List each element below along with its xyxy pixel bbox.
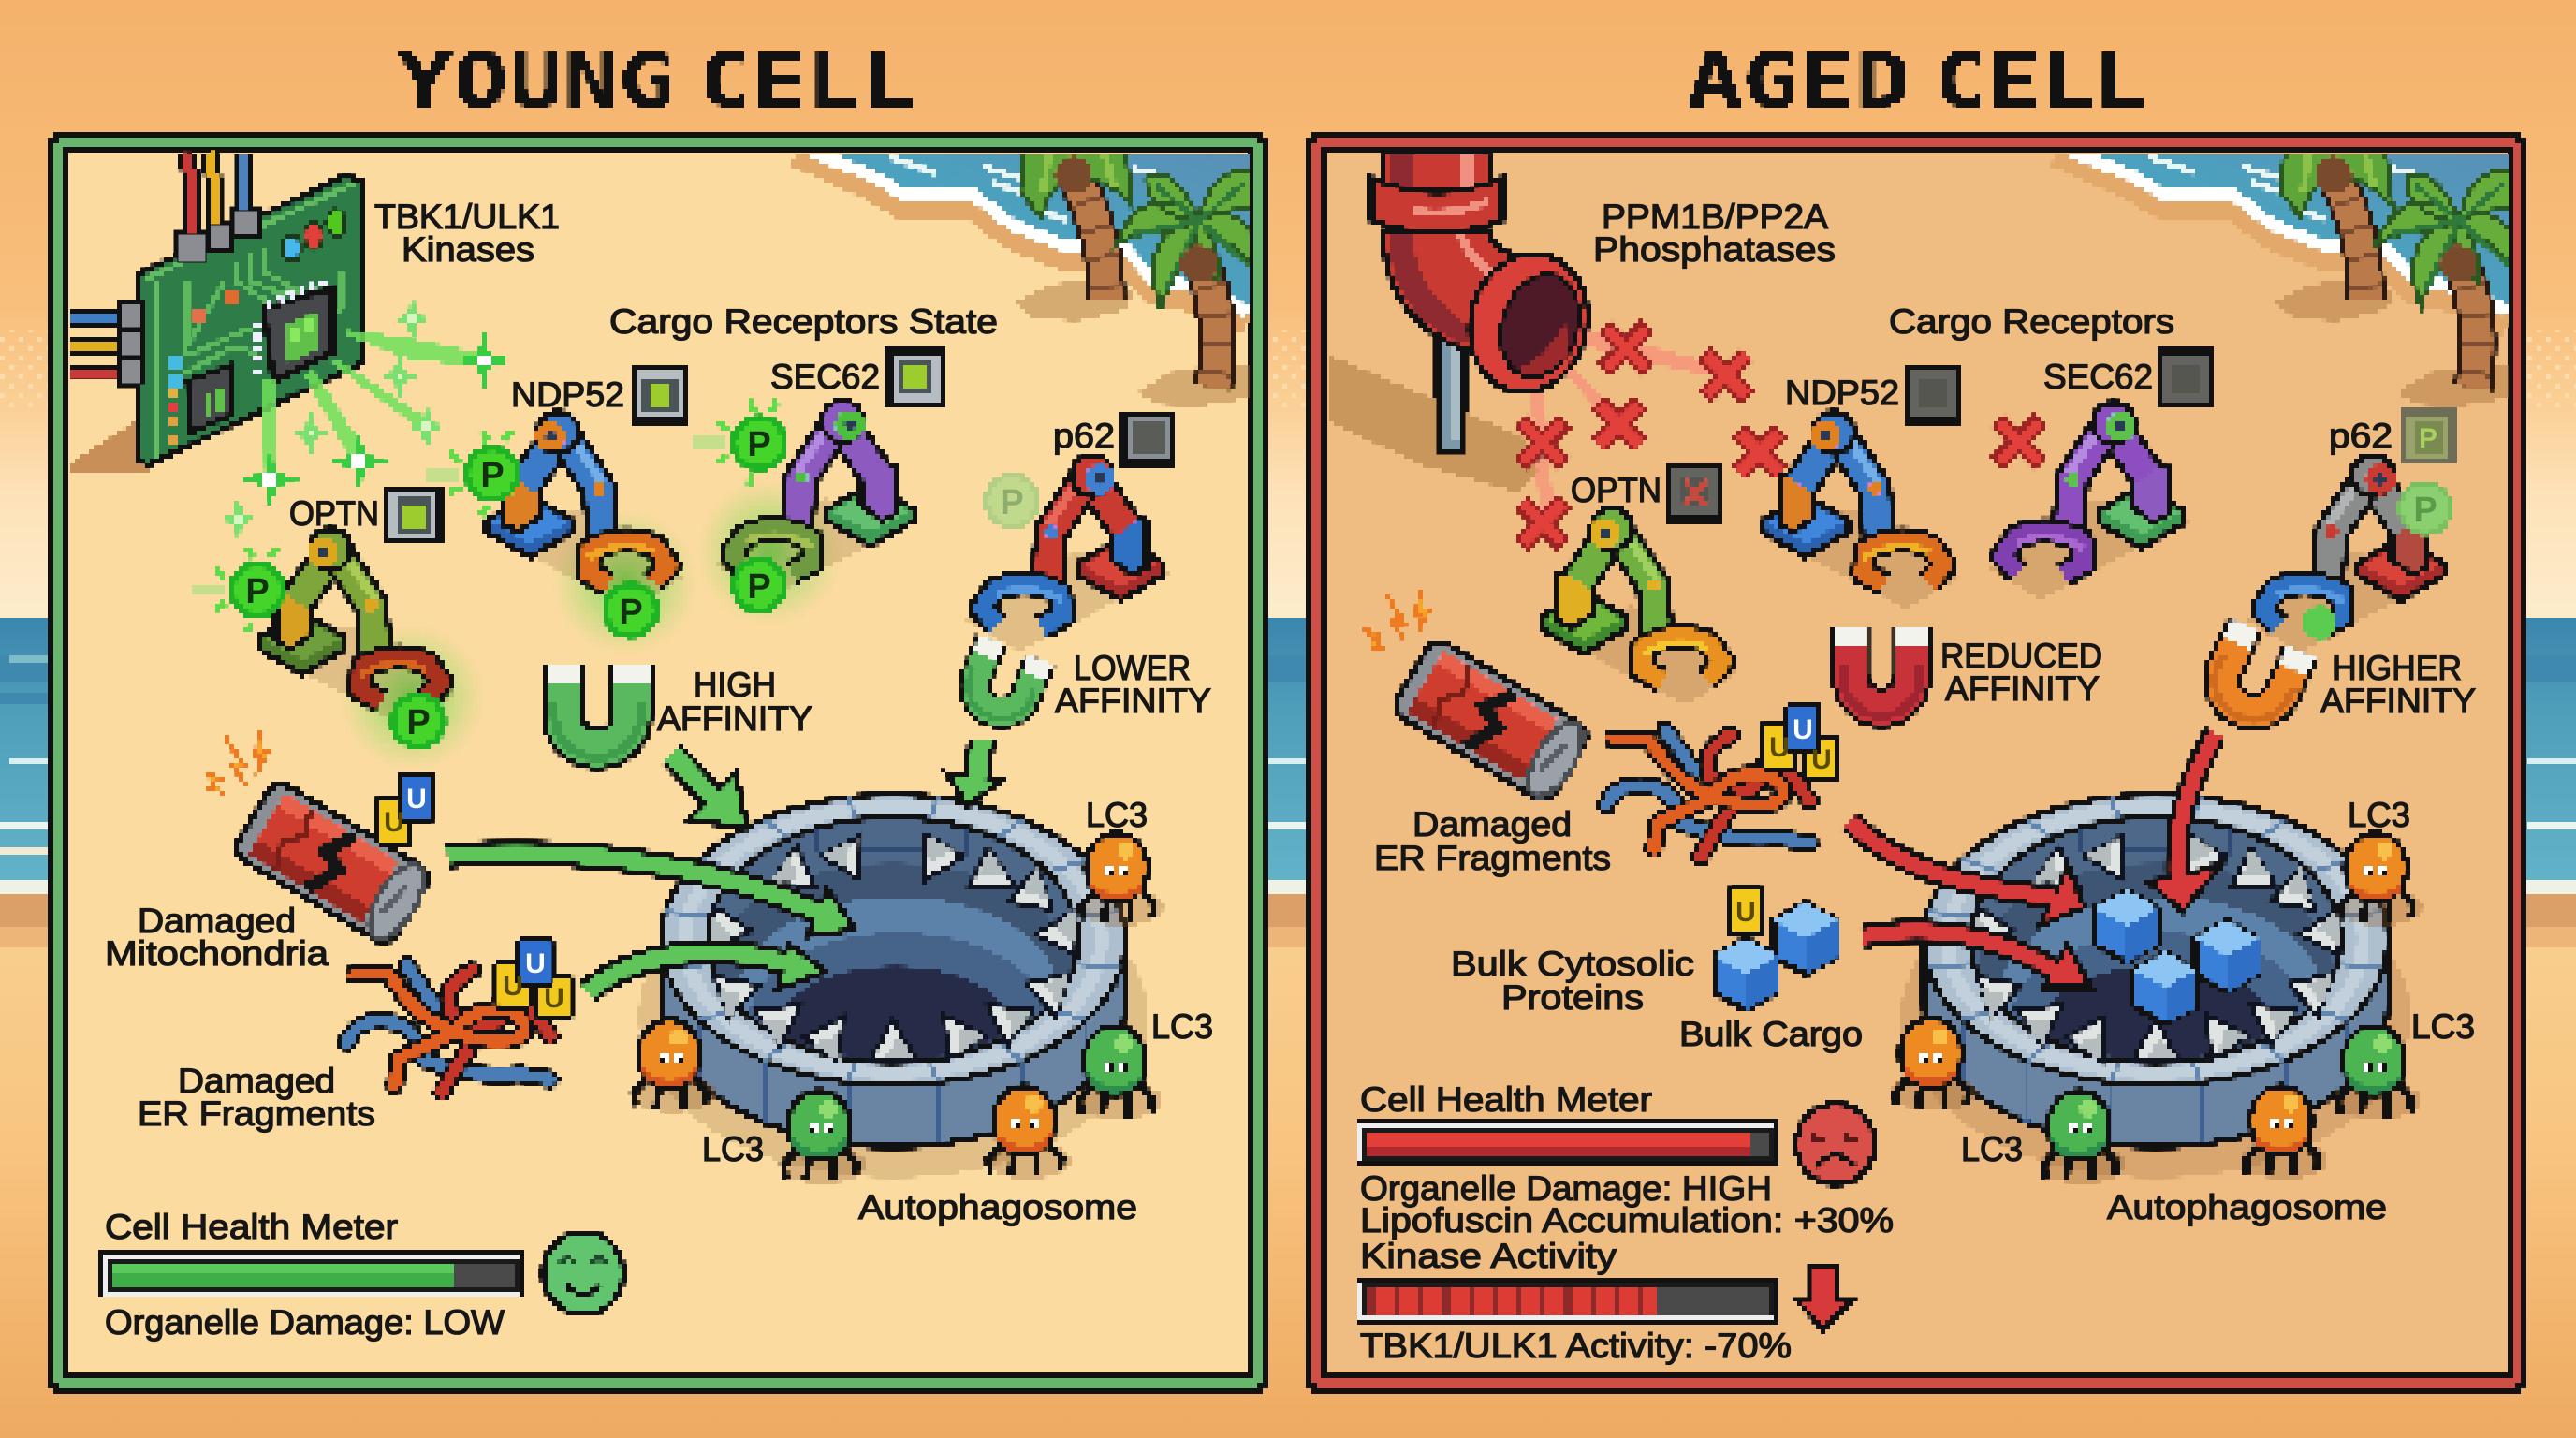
scene art: aged cell (1329, 153, 2524, 1329)
kinase phosphorylation rays and sparks (221, 299, 512, 539)
title: YOUNG CELL: CELL (698, 37, 915, 125)
label: TBK1/ULK1 Kinases: Kinases (402, 230, 534, 269)
label: SEC62: SEC62 (770, 358, 880, 396)
marks: P and U letters: U (544, 983, 564, 1014)
kinase activity bar (1355, 1277, 1779, 1325)
label: NDP52: NDP52 (511, 375, 624, 414)
arm: OPTN with glowing P (190, 529, 485, 770)
arrows into autophagosome (447, 740, 1000, 992)
icon: high affinity magnet (546, 663, 649, 757)
autophagosome ring with cargo cubes (1901, 795, 2410, 1178)
label: Bulk Cargo: Bulk Cargo (1679, 1015, 1863, 1053)
label: HIGH AFFINITY (657, 666, 812, 738)
marks: P and U letters: U (503, 971, 523, 1002)
label: Bulk Cytosolic Proteins (1451, 945, 1694, 1017)
arrows into autophagosome (1851, 733, 2220, 988)
label: PPM1B/PP2A Phosphatases: Phosphatases (1593, 230, 1836, 269)
label: Bulk Cytosolic Proteins: Bulk Cytosolic (1451, 945, 1694, 983)
label: LC3 upper right: LC3 (1086, 796, 1148, 834)
autophagosome ring (638, 795, 1148, 1178)
label: HIGHER AFFINITY: HIGHER (2333, 649, 2462, 687)
label: Damaged Mitochondria (105, 902, 329, 973)
marks: P and U letters: P (619, 593, 643, 632)
arm: p62 with faded P (966, 455, 1169, 652)
label: p62: p62 (2329, 417, 2393, 455)
icon: lower affinity magnet (953, 635, 1052, 731)
label: PPM1B/PP2A Phosphatases: PPM1B/PP2A (1602, 198, 1828, 236)
icon: bulk cargo cubes (1714, 888, 1837, 1010)
label: NDP52: NDP52 (1785, 374, 1899, 412)
heading: Cargo Receptors: Cargo Receptors (1889, 302, 2174, 341)
label: LC3 right: LC3 (1151, 1007, 1213, 1046)
label: Organelle Damage HIGH: Organelle Damage: HIGH (1360, 1169, 1772, 1208)
icon: circuit board kinase (70, 153, 363, 473)
marks: P and U letters: U (1735, 897, 1756, 928)
cell health bar (100, 1250, 525, 1299)
label: REDUCED AFFINITY: REDUCED (1940, 637, 2102, 675)
label: PPM1B/PP2A Phosphatases (1593, 198, 1836, 269)
label: LC3 upper right: LC3 (2348, 796, 2410, 834)
beach corner with palm trees (2056, 153, 2524, 406)
marks: P and U letters (1735, 423, 2437, 928)
label: Damaged ER Fragments: Damaged (1412, 805, 1572, 844)
label: SEC62: SEC62 (2043, 358, 2153, 396)
marks: P and U letters: U (1793, 714, 1813, 745)
panel frame: red (1306, 132, 2526, 1394)
icon: happy face (543, 1232, 623, 1314)
label: TBK1/ULK1 Activity -70%: TBK1/ULK1 Activity: -70% (1360, 1327, 1792, 1365)
label: LC3 bottom: LC3 (702, 1130, 764, 1168)
marks: P and U letters: U (406, 784, 427, 814)
marks: P and U letters: P (747, 567, 771, 607)
panel frame: green (48, 132, 1268, 1394)
icon: reduced affinity magnet (1835, 626, 1928, 716)
icon: sad face (1796, 1104, 1875, 1184)
label: Damaged Mitochondria: Damaged (138, 902, 296, 940)
arm: NDP52 (1757, 412, 1960, 609)
label: LC3 bottom: LC3 (1961, 1130, 2023, 1168)
label: Organelle Damage LOW: Organelle Damage: LOW (105, 1303, 505, 1342)
label: TBK1/ULK1 Kinases (374, 198, 560, 269)
marks: P and U letters (245, 425, 1024, 1014)
label: HIGH AFFINITY: HIGH (694, 666, 776, 704)
marks: P and U letters: U (1769, 732, 1790, 763)
icon: damaged mitochondria battery (1365, 590, 1593, 806)
label: Cell Health Meter: Cell Health Meter (1360, 1080, 1652, 1119)
marks: P and U letters: U (1811, 744, 1832, 775)
label: Damaged ER Fragments: ER Fragments (138, 1094, 375, 1133)
marks: P and U letters: U (525, 948, 546, 979)
label: HIGH AFFINITY: AFFINITY (657, 699, 812, 738)
title: AGED CELL: AGED (1687, 37, 1910, 125)
status icons: receptor states (1670, 351, 2452, 520)
title: YOUNG CELL: YOUNG (398, 37, 674, 125)
label: OPTN: OPTN (289, 494, 379, 533)
marks: P and U letters: P (2419, 423, 2437, 454)
label: Damaged ER Fragments: Damaged (178, 1062, 335, 1100)
cell health bar (1355, 1121, 1779, 1167)
icon: damaged ER fragments (1606, 706, 1838, 857)
arm: p62 with P (2247, 455, 2451, 652)
arm: OPTN (1535, 508, 1738, 705)
label: Damaged ER Fragments: ER Fragments (1374, 839, 1611, 877)
marks: P and U letters: P (480, 456, 505, 495)
label: Kinase Activity: Kinase Activity (1360, 1237, 1617, 1275)
label: Autophagosome: Autophagosome (858, 1188, 1137, 1226)
LC3 bugs (630, 833, 1164, 1183)
icon: down arrow (1797, 1268, 1851, 1329)
label: OPTN: OPTN (1571, 471, 1661, 509)
label: Damaged ER Fragments (138, 1062, 375, 1133)
label: Bulk Cytosolic Proteins: Proteins (1501, 978, 1644, 1017)
label: Cell Health Meter: Cell Health Meter (105, 1208, 398, 1246)
label: REDUCED AFFINITY: AFFINITY (1945, 669, 2100, 708)
arm: SEC62 (1987, 403, 2190, 599)
label: LOWER AFFINITY: AFFINITY (1055, 682, 1211, 720)
marks: P and U letters: P (406, 703, 431, 742)
label: LOWER AFFINITY: LOWER (1074, 649, 1191, 687)
inhibited rays and red X marks (1521, 327, 2041, 545)
label: Autophagosome: Autophagosome (2107, 1188, 2387, 1226)
LC3 bugs (1892, 833, 2422, 1183)
label: Lipofuscin Accumulation +30%: Lipofuscin Accumulation: +30% (1360, 1201, 1894, 1240)
arm: NDP52 with glowing P (425, 412, 698, 655)
label: REDUCED AFFINITY (1940, 637, 2102, 708)
marks: P and U letters: P (2413, 491, 2437, 530)
label: HIGHER AFFINITY (2320, 649, 2476, 720)
label: LOWER AFFINITY (1055, 649, 1211, 720)
scene art: young cell (70, 153, 1264, 1314)
status icons: receptor states (388, 351, 1174, 542)
label: Damaged ER Fragments (1374, 805, 1611, 877)
label: HIGHER AFFINITY: AFFINITY (2320, 682, 2476, 720)
label: p62: p62 (1053, 417, 1115, 455)
label: LC3 right: LC3 (2411, 1007, 2475, 1046)
icon: damaged mitochondria battery (204, 732, 434, 948)
panel: aged cell (1306, 132, 2526, 1394)
panel: young cell (48, 132, 1268, 1394)
marks: P and U letters: P (747, 425, 771, 464)
icon: higher affinity magnet (2195, 619, 2315, 735)
beach corner with palm trees (797, 153, 1264, 406)
marks: P and U letters: U (384, 807, 404, 838)
label: Damaged Mitochondria: Mitochondria (105, 934, 329, 973)
marks: P and U letters: P (245, 572, 270, 611)
heading: Cargo Receptors State: Cargo Receptors State (609, 302, 998, 341)
icon: damaged ER fragments (347, 940, 571, 1093)
marks: P and U letters: P (1000, 483, 1024, 522)
arm: SEC62 with glowing P (692, 401, 919, 625)
title: AGED CELL: CELL (1934, 37, 2147, 125)
icon: red phosphatase pipe (1329, 153, 1603, 492)
label: TBK1/ULK1 Kinases: TBK1/ULK1 (374, 198, 560, 236)
